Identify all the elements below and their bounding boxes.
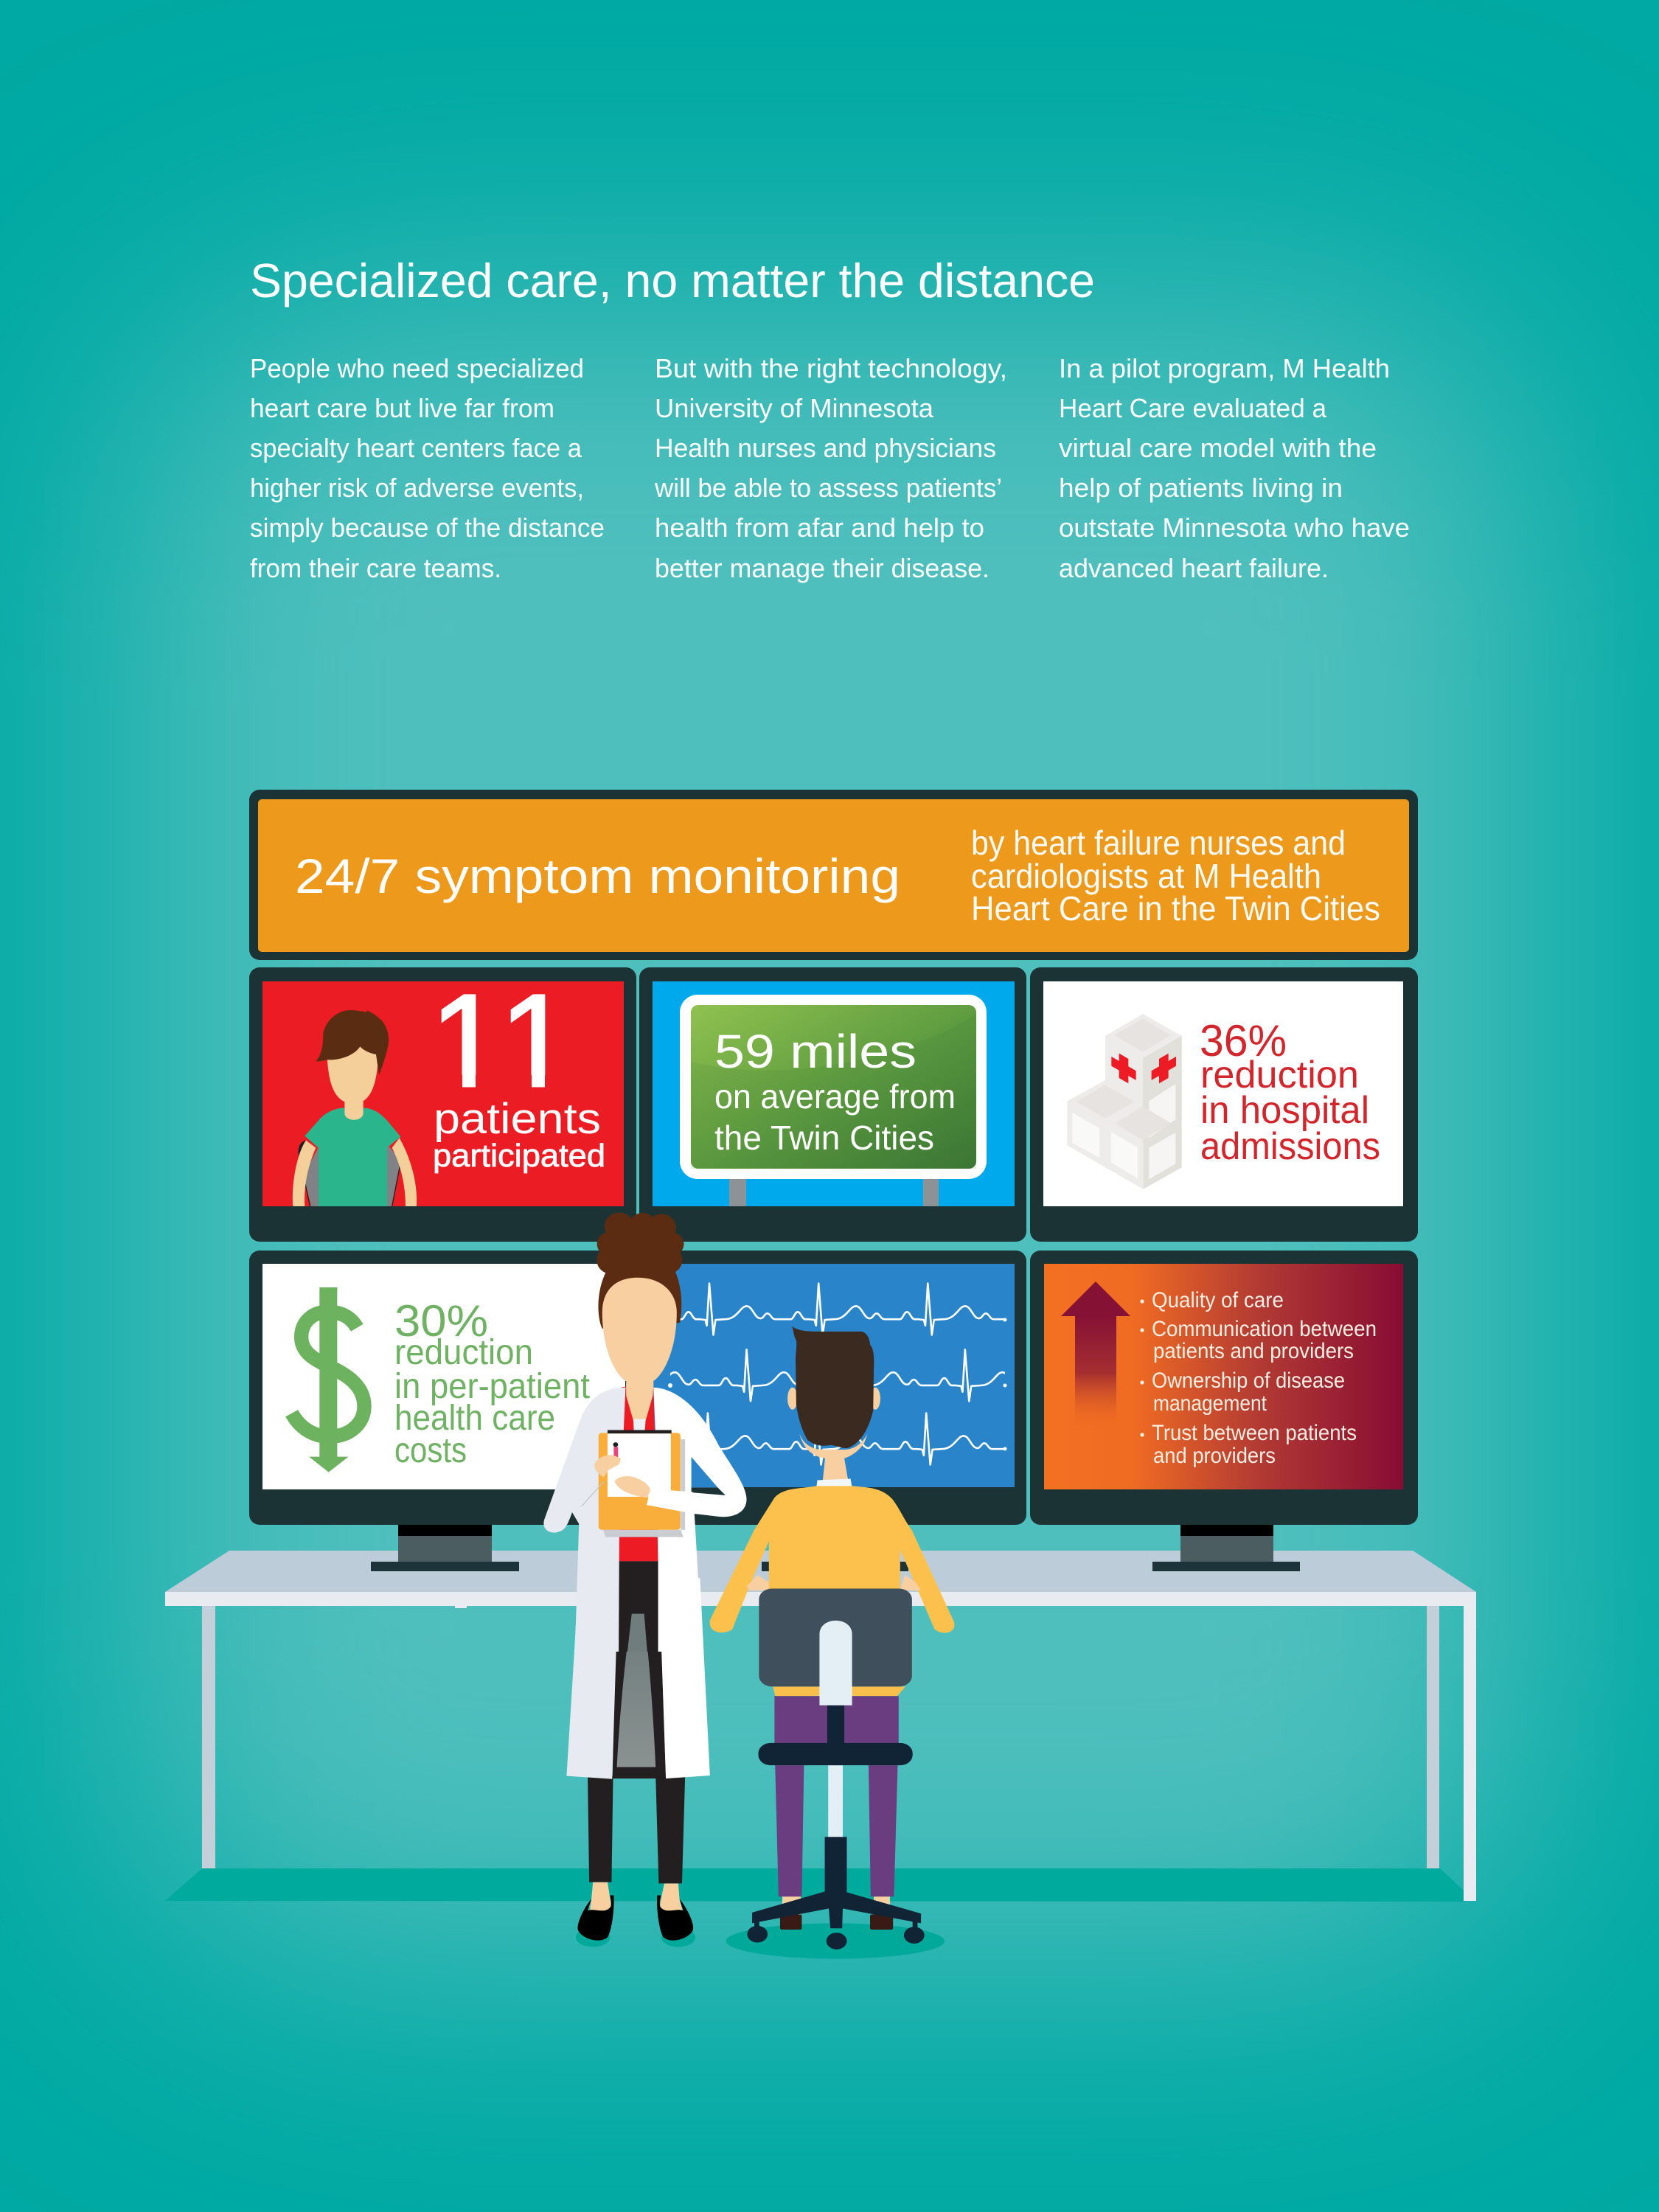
label: reduction in hospital admissions: reduction: [1200, 1054, 1359, 1096]
list: improved outcomes: Trust between patients: [1152, 1421, 1357, 1445]
label: participated: participated: [433, 1138, 605, 1174]
floor shadow under desk: [165, 1868, 1464, 1902]
list: improved outcomes: Quality of care: [1152, 1288, 1284, 1312]
monitor: 36% reduction: [1030, 967, 1418, 1242]
icon: road sign: [680, 995, 987, 1206]
stat: 36%: 36%: [1200, 1016, 1287, 1065]
icon: up arrow: [1061, 1281, 1130, 1430]
headline: 24/7: 24/7 symptom monitoring: [295, 849, 900, 903]
label: reduction in hospital admissions: admissions: [1200, 1125, 1380, 1168]
label: reduction in per-patient health care costs: reduction: [394, 1333, 533, 1372]
list: improved outcomes: patients and providers: [1153, 1339, 1354, 1363]
label: reduction in per-patient health care costs: in per-patient: [394, 1367, 590, 1406]
caption: who monitors: [971, 824, 1380, 928]
caption: who monitors: by heart failure nurses and: [971, 824, 1346, 862]
label: reduction in hospital admissions: in hospital: [1200, 1089, 1369, 1132]
text block: column 3: [1059, 353, 1410, 583]
label: on average from the Twin Cities: on average from: [714, 1077, 956, 1116]
desk: [165, 1551, 1476, 1901]
monitor: 24/7 symptom monitoring: [249, 790, 1418, 960]
text block: column 1: higher risk of adverse events,: [250, 473, 584, 503]
text block: column 1: specialty heart centers face a: [250, 433, 582, 463]
chart: ECG traces: [589, 1284, 1046, 1465]
doctor: legs and shoes: [566, 1578, 710, 1947]
title: Specialized care, no matter the distance: [250, 254, 1095, 307]
patient on stool: [710, 1326, 954, 1959]
text block: column 2: [654, 353, 1007, 583]
label: on average from the Twin Cities: [714, 1077, 956, 1157]
text block: column 3: advanced heart failure.: [1059, 553, 1329, 583]
icon: dollar arrow: [292, 1287, 364, 1472]
text block: column 3: In a pilot program, M Health: [1059, 353, 1390, 383]
monitor stands: [371, 1525, 1300, 1571]
text block: column 2: University of Minnesota: [655, 393, 934, 423]
stat: 11: 11: [430, 967, 573, 1114]
label: on average from the Twin Cities: the Twin Cities: [714, 1119, 934, 1157]
text block: column 3: help of patients living in: [1059, 473, 1343, 503]
text block: column 1: People who need specialized: [250, 353, 584, 383]
doctor: upper body: [543, 1213, 747, 1652]
text block: column 1: [250, 353, 605, 583]
list: improved outcomes: management: [1153, 1391, 1267, 1416]
text block: column 3: Heart Care evaluated a: [1059, 393, 1327, 423]
monitor: 11 patients: [249, 967, 636, 1242]
label: patients: patients: [434, 1095, 601, 1143]
caption: who monitors: Heart Care in the Twin Cities: [971, 889, 1380, 928]
list: improved outcomes: Communication between: [1152, 1317, 1377, 1341]
text block: column 1: simply because of the distance: [250, 512, 605, 543]
patient: upper body: [710, 1326, 954, 1633]
caption: who monitors: cardiologists at M Health: [971, 857, 1321, 895]
text block: column 2: will be able to assess patients’: [654, 473, 1002, 503]
patient: legs and stool base: [726, 1686, 945, 1959]
stat: 30%: 30%: [394, 1296, 488, 1346]
label: reduction in per-patient health care costs: health care: [394, 1399, 555, 1438]
monitor: 30% reduction: [249, 1251, 636, 1525]
list: improved outcomes: [1140, 1288, 1377, 1468]
icon: patient in chair: [293, 1010, 417, 1206]
label: reduction in per-patient health care costs: costs: [394, 1431, 467, 1470]
text block: column 2: But with the right technology,: [655, 353, 1007, 383]
list: improved outcomes: Ownership of disease: [1152, 1368, 1345, 1393]
icon: hospital blocks: [1067, 1014, 1182, 1189]
text block: column 2: health from afar and help to: [655, 512, 984, 543]
text block: column 1: from their care teams.: [250, 553, 501, 583]
monitor: heart rhythm: [625, 1251, 1026, 1525]
text block: column 1: heart care but live far from: [250, 393, 554, 423]
label: reduction in per-patient health care costs: [394, 1333, 590, 1470]
text block: column 3: virtual care model with the: [1059, 433, 1377, 463]
label: reduction in hospital admissions: [1200, 1054, 1380, 1168]
monitor: care improvements: [1030, 1251, 1418, 1525]
monitor: 59 miles: [639, 967, 1026, 1242]
stool backrest: [759, 1588, 912, 1705]
text block: column 2: better manage their disease.: [655, 553, 990, 583]
stat: 59 miles: 59 miles: [714, 1025, 917, 1078]
text block: column 2: Health nurses and physicians: [655, 433, 996, 463]
doctor: [543, 1213, 747, 1947]
doctor: hair bun: [597, 1213, 684, 1279]
text block: column 3: outstate Minnesota who have: [1059, 512, 1410, 543]
list: improved outcomes: and providers: [1153, 1444, 1276, 1468]
